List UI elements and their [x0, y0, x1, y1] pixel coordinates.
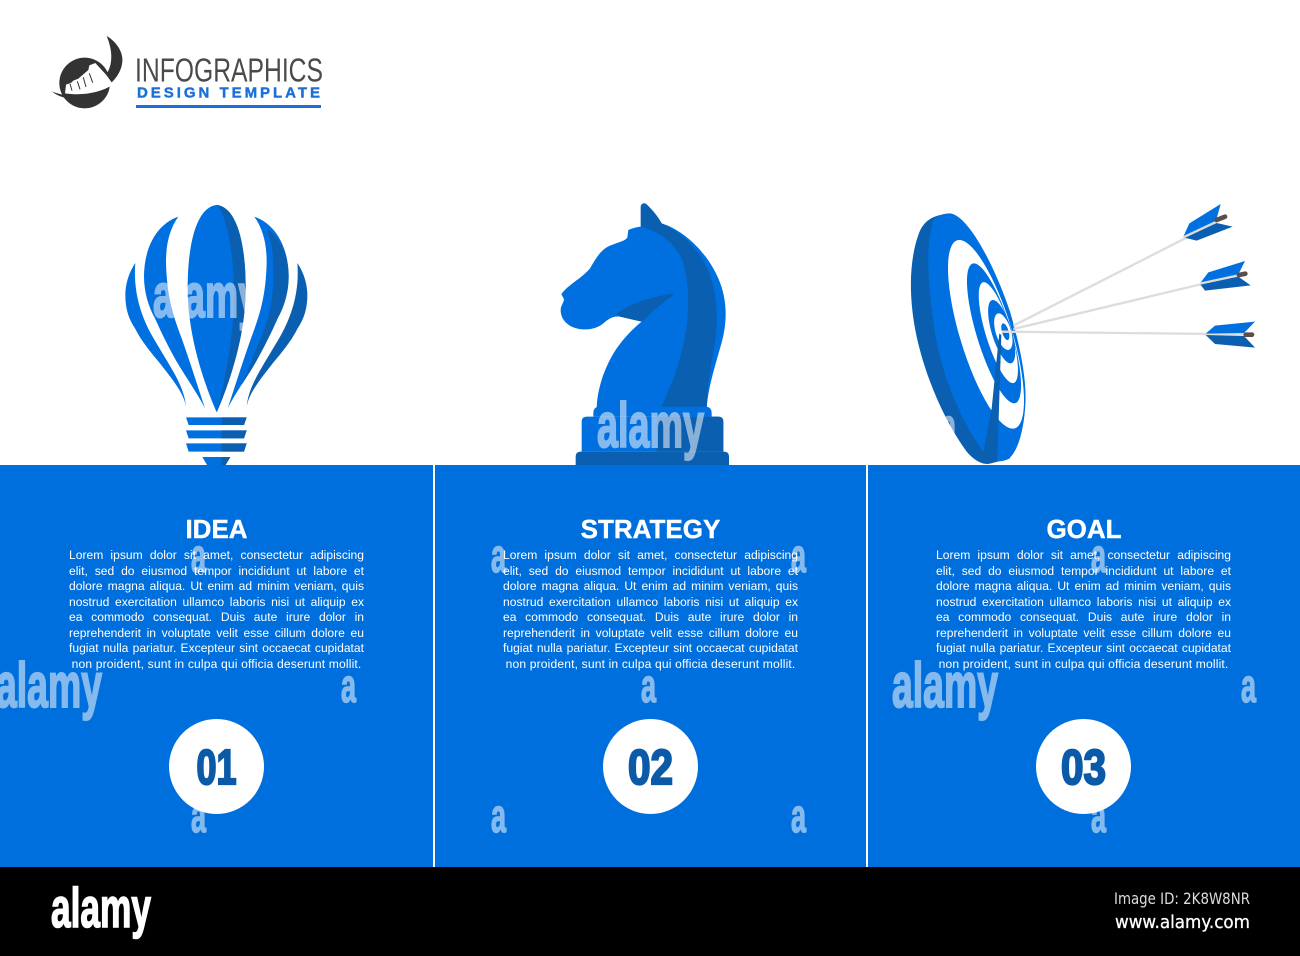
watermarks: alamy [153, 262, 259, 331]
knight mane shadow [641, 203, 717, 410]
panel: strategy [435, 465, 866, 867]
footer website: www.alamy.com [1115, 912, 1250, 933]
number badge 03 [1036, 719, 1131, 814]
text block: goal: Lorem ipsum dolor sit amet, consectetur adipiscing [936, 548, 1231, 562]
text block: goal: ea commodo consequat. Duis aute irure dolor in [936, 610, 1231, 624]
heading: goal: GOAL [1046, 514, 1122, 544]
watermarks: alamy [0, 651, 102, 721]
knight head and neck [561, 223, 726, 410]
text block: idea: elit, sed do eiusmod tempor incididunt ut labore et [69, 564, 364, 578]
text block: idea: dolore magna aliqua. Ut enim ad minim veniam, quis [69, 579, 364, 593]
number badge 03: 03 [1061, 741, 1106, 795]
text block: idea: reprehenderit in voluptate velit esse cillum dolore eu [69, 626, 364, 640]
panel: idea [0, 465, 433, 867]
text block: goal: dolore magna aliqua. Ut enim ad minim veniam, quis [936, 579, 1231, 593]
watermarks: a [491, 529, 506, 582]
text block: goal: fugiat nulla pariatur. Excepteur sint occaecat cupidatat [936, 641, 1231, 655]
text block: idea: fugiat nulla pariatur. Excepteur sint occaecat cupidatat [69, 641, 364, 655]
icon: target with arrows [910, 204, 1255, 464]
text block: goal [936, 548, 1231, 671]
watermarks: a [1091, 529, 1106, 582]
watermarks: alamy [892, 651, 998, 721]
text block: strategy: elit, sed do eiusmod tempor incididunt ut labore et [503, 564, 798, 578]
footer bar [0, 867, 1300, 956]
number badge 02: 02 [628, 741, 672, 795]
text block: strategy: non proident, sunt in culpa qui officia deserunt mollit. [506, 657, 795, 671]
watermarks: a [191, 529, 206, 582]
arrow 2 [1013, 261, 1251, 329]
heading: strategy: STRATEGY [581, 514, 720, 544]
watermarks: a [791, 789, 806, 842]
number badge 02 [602, 719, 698, 814]
icon: chess knight [560, 203, 729, 465]
text block: goal: elit, sed do eiusmod tempor incididunt ut labore et [936, 564, 1231, 578]
text block: goal: non proident, sunt in culpa qui officia deserunt mollit. [939, 657, 1228, 671]
text block: idea [69, 548, 364, 671]
text block: strategy: reprehenderit in voluptate velit esse cillum dolore eu [503, 626, 798, 640]
logo underline [136, 105, 321, 108]
balloon right gores [228, 217, 307, 408]
knight base [576, 407, 729, 466]
text block: idea: ea commodo consequat. Duis aute irure dolor in [69, 610, 364, 624]
text block: idea: Lorem ipsum dolor sit amet, consectetur adipiscing [69, 548, 364, 562]
watermarks: a [791, 529, 806, 582]
footer brand: alamy [51, 876, 151, 939]
watermarks: a [341, 659, 356, 712]
balloon left gores [125, 217, 205, 408]
icon: hot air balloon light bulb [125, 205, 308, 465]
arrow 1 [1013, 204, 1233, 326]
text block: strategy: dolore magna aliqua. Ut enim ad minim veniam, quis [503, 579, 798, 593]
text block: goal: nostrud exercitation ullamco laboris nisi ut aliquip ex [936, 595, 1231, 609]
arrow 3 [1002, 322, 1255, 348]
text block: strategy: ea commodo consequat. Duis aute irure dolor in [503, 610, 798, 624]
watermarks: a [641, 659, 656, 712]
logo subtitle: DESIGN TEMPLATE [137, 84, 320, 102]
panel: goal [868, 465, 1300, 867]
footer image id: Image ID: 2K8W8NR [1114, 889, 1250, 908]
knight jaw shadow [616, 293, 676, 322]
bulb base rings [186, 417, 247, 466]
text block: idea: non proident, sunt in culpa qui officia deserunt mollit. [72, 657, 361, 671]
balloon centre gore [188, 205, 246, 412]
watermarks: a [491, 789, 506, 842]
text block: strategy [503, 548, 798, 671]
watermarks: a [941, 399, 956, 452]
text block: idea: nostrud exercitation ullamco laboris nisi ut aliquip ex [69, 595, 364, 609]
text block: strategy: nostrud exercitation ullamco laboris nisi ut aliquip ex [503, 595, 798, 609]
watermarks: a [191, 789, 206, 842]
number badge 01 [169, 719, 264, 814]
text block: strategy: Lorem ipsum dolor sit amet, consectetur adipiscing [503, 548, 798, 562]
number badge 01: 01 [196, 741, 236, 795]
icon: logo emblem [52, 36, 122, 108]
logo [52, 36, 323, 108]
text block: strategy: fugiat nulla pariatur. Excepteur sint occaecat cupidatat [503, 641, 798, 655]
watermarks: a [1241, 659, 1256, 712]
watermarks: alamy [597, 391, 704, 461]
target board [911, 213, 1040, 464]
heading: idea: IDEA [185, 514, 248, 544]
text block: goal: reprehenderit in voluptate velit esse cillum dolore eu [936, 626, 1231, 640]
watermarks: a [1091, 789, 1106, 842]
